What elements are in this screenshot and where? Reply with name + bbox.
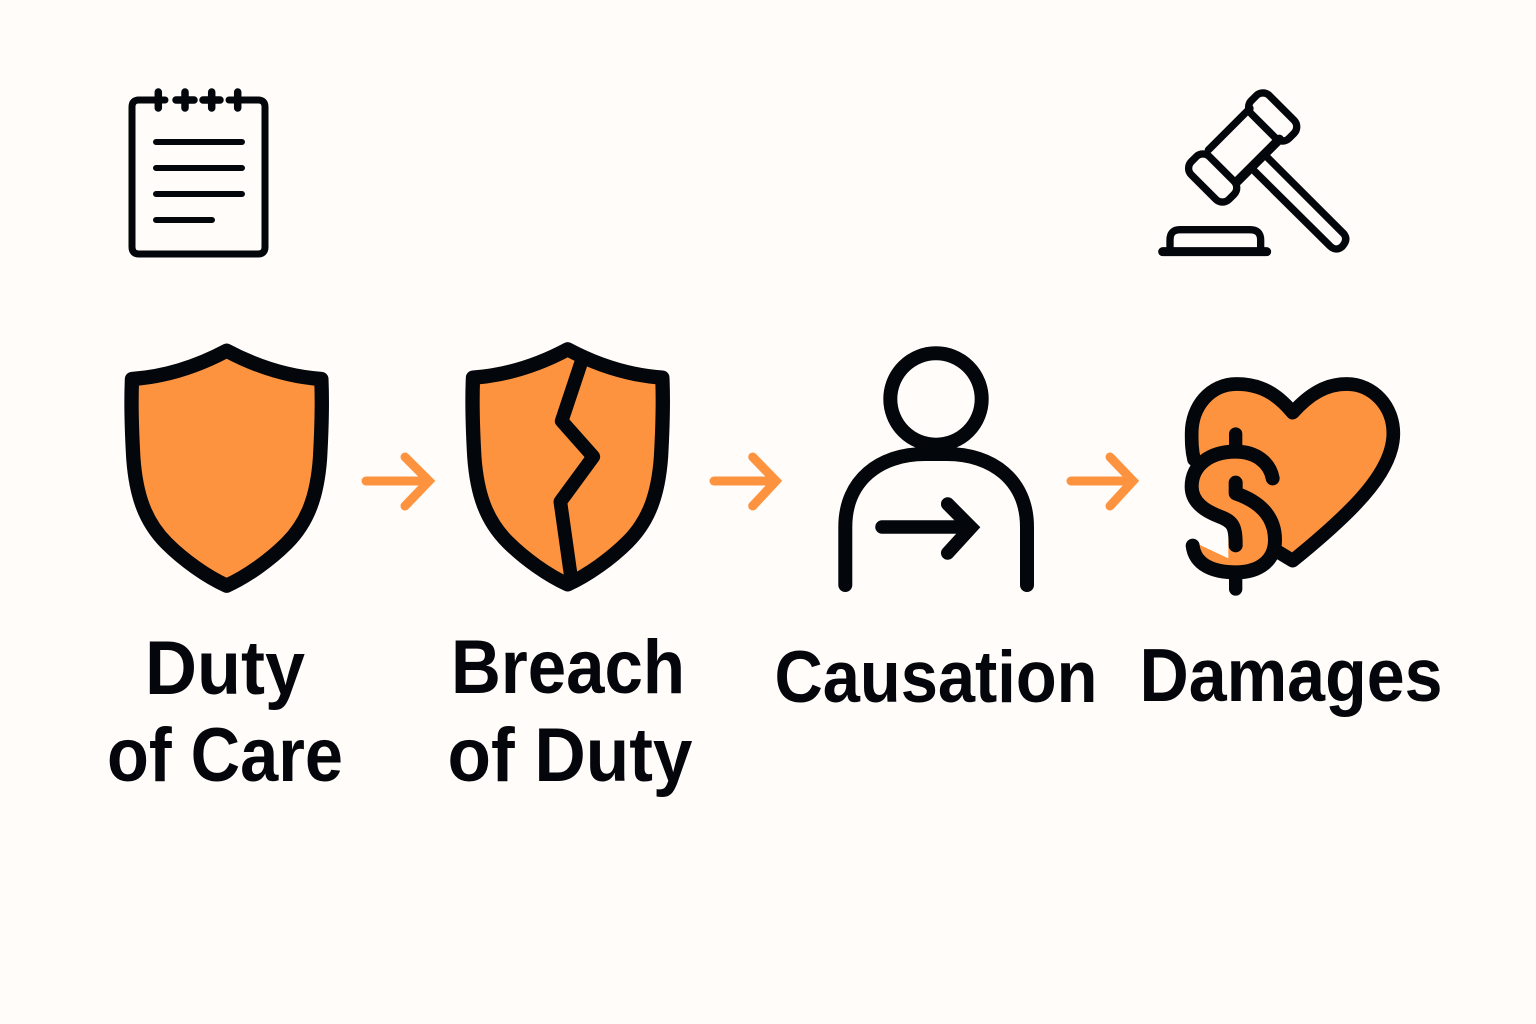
label: Damages: Damages — [1140, 633, 1442, 717]
icon: orange shield — [131, 351, 322, 586]
arrow 1 — [366, 457, 429, 506]
icon: heart with dollar — [1192, 384, 1393, 589]
label: Duty of Care: of Care — [107, 713, 343, 798]
icon: notepad — [132, 92, 265, 254]
label: Breach of Duty: of Duty — [448, 713, 692, 798]
label: Breach of Duty: Breach — [451, 625, 685, 710]
label: Breach of Duty — [448, 625, 692, 798]
icon: cracked shield — [472, 349, 663, 584]
arrow 3 — [1071, 457, 1133, 506]
label: Duty of Care — [107, 626, 343, 798]
icon: person with arrow — [845, 353, 1027, 585]
label: Causation: Causation — [774, 637, 1098, 718]
arrow 2 — [714, 457, 776, 506]
icon: gavel — [1163, 89, 1346, 252]
label: Duty of Care: Duty — [145, 626, 305, 711]
